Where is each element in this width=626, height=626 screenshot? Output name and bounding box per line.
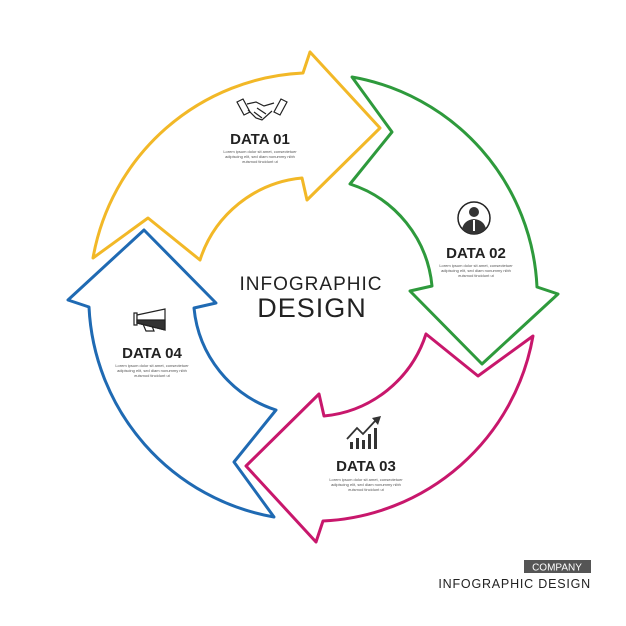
icon: growth chart xyxy=(347,416,381,449)
icon: businessman xyxy=(458,202,490,234)
block: data 02: Lorem ipsum dolor sit amet, consectetuer xyxy=(439,263,513,268)
arrow: data 04 blue xyxy=(68,230,276,517)
block: data 01: adipiscing elit, sed diam nonummy nibh xyxy=(225,154,295,159)
block: data 03: adipiscing elit, sed diam nonummy nibh xyxy=(331,482,401,487)
block: data 01: Lorem ipsum dolor sit amet, consectetuer xyxy=(223,149,297,154)
center title: INFOGRAPHIC xyxy=(240,274,382,295)
icon: megaphone xyxy=(134,309,165,331)
block: data 01: euismod tincidunt ut xyxy=(242,159,279,164)
footer title: INFOGRAPHIC DESIGN xyxy=(438,577,591,591)
block: data 02: euismod tincidunt ut xyxy=(458,273,495,278)
icon: handshake xyxy=(237,99,287,120)
company badge xyxy=(524,560,591,574)
block: data 03: Lorem ipsum dolor sit amet, consectetuer xyxy=(329,477,403,482)
block: data 04: DATA 04 xyxy=(122,345,183,362)
block: data 03: euismod tincidunt ut xyxy=(348,487,385,492)
block: data 01 xyxy=(223,131,297,164)
company badge: COMPANY xyxy=(532,562,582,574)
block: data 01: DATA 01 xyxy=(230,131,290,148)
block: data 04: euismod tincidunt ut xyxy=(134,373,171,378)
arrow: data 02 green xyxy=(350,77,558,364)
block: data 02 xyxy=(439,245,513,278)
arrow: data 01 yellow xyxy=(93,52,380,260)
block: data 04: Lorem ipsum dolor sit amet, consectetuer xyxy=(115,363,189,368)
block: data 02: DATA 02 xyxy=(446,245,506,262)
block: data 03: DATA 03 xyxy=(336,458,396,475)
center title xyxy=(240,274,382,323)
block: data 04 xyxy=(115,345,189,378)
block: data 02: adipiscing elit, sed diam nonummy nibh xyxy=(441,268,511,273)
block: data 04: adipiscing elit, sed diam nonummy nibh xyxy=(117,368,187,373)
arrow: data 03 magenta xyxy=(246,334,533,542)
center title: DESIGN xyxy=(257,293,367,323)
block: data 03 xyxy=(329,458,403,492)
